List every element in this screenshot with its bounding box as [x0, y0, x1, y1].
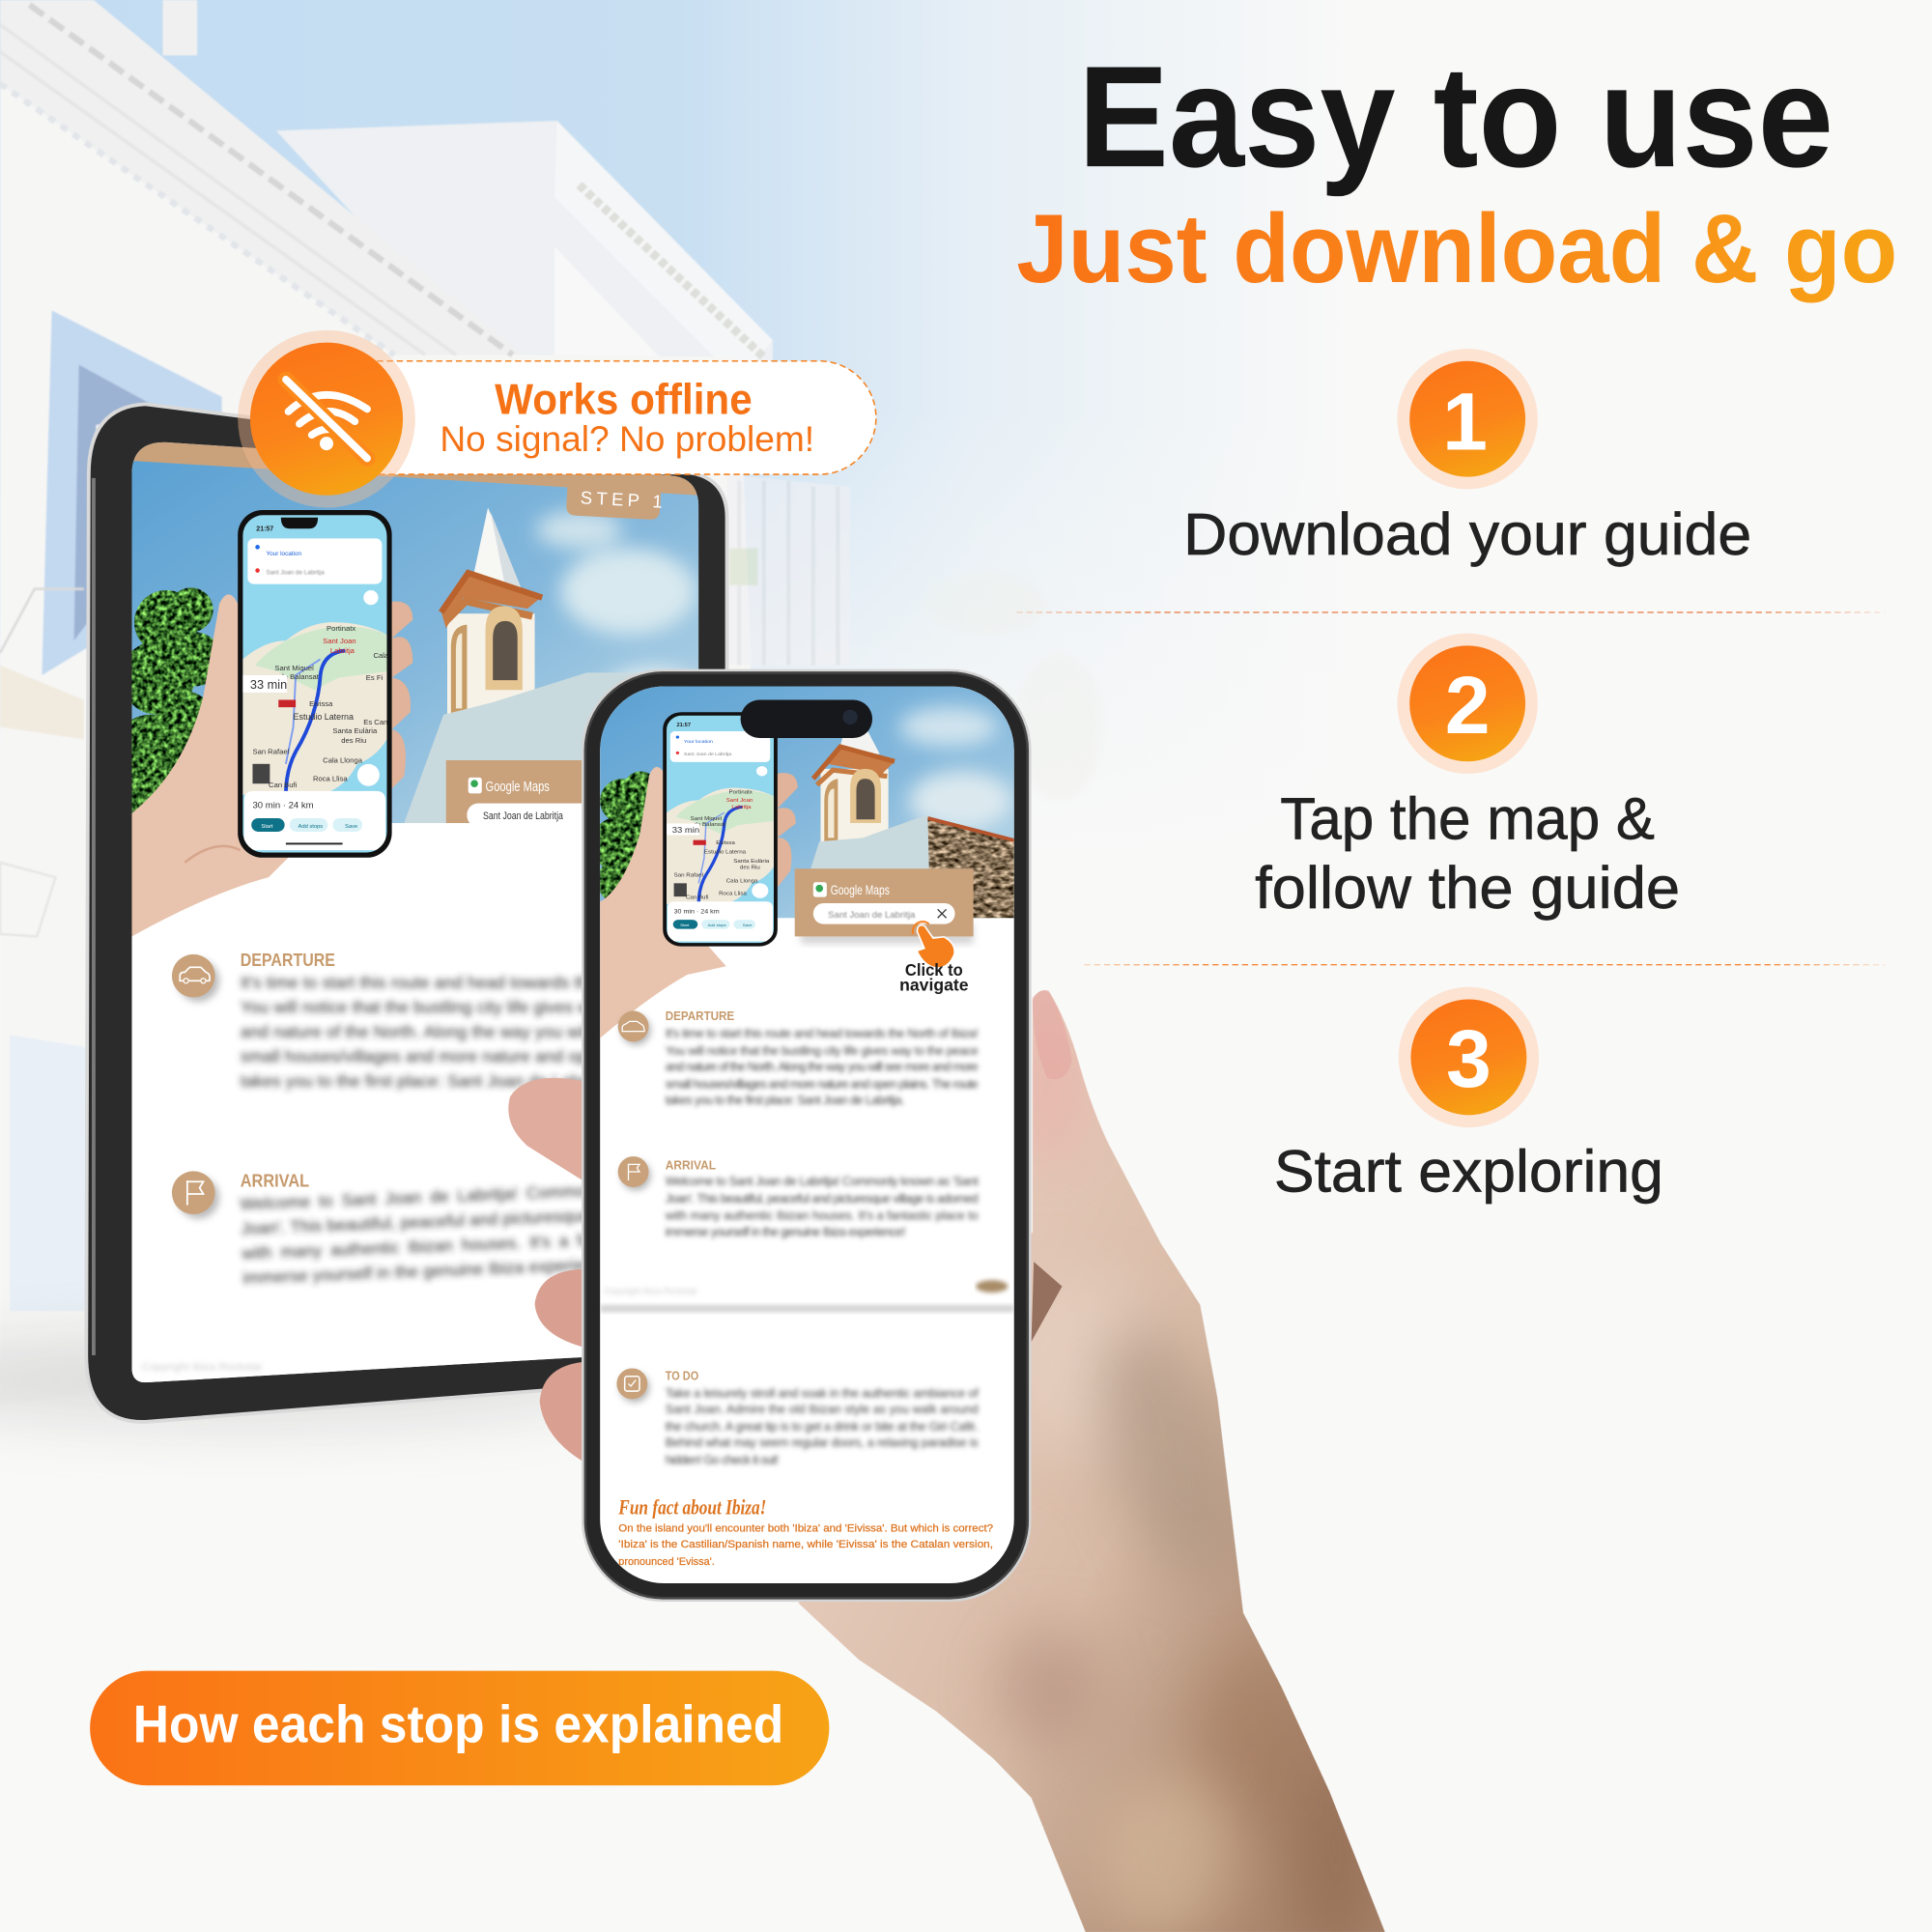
- phone photo: tree: [600, 771, 650, 898]
- phone: to do section: Behind what may seem regular doors, a relaxing paradise is: [666, 1435, 979, 1449]
- tablet: departure section: and nature of the North. Along the way you will see more and more: [241, 1022, 743, 1041]
- subtitle: Just download & go: [1016, 195, 1897, 303]
- phone: fun fact: Fun fact about Ibiza!: [618, 1496, 766, 1520]
- phone: tap hand icon: [913, 922, 953, 967]
- tablet: hand with mini phone: Can Bufi: [269, 781, 298, 789]
- tablet: departure section: [172, 953, 582, 1094]
- phone: hand with mini phone: Eivissa: [716, 840, 736, 846]
- tablet: hand with mini phone: Es Fi: [366, 673, 384, 682]
- tablet: hand with mini phone: 21:57: [256, 526, 273, 533]
- phone: hand with mini phone: Add stops: [708, 923, 726, 927]
- phone: hand with mini phone: [545, 712, 798, 1083]
- main phone screen: [600, 686, 1014, 1566]
- phone: hand with mini phone: Save: [743, 923, 753, 927]
- phone: hand with mini phone: Estudio Laterna: [704, 850, 747, 855]
- title: Easy to use: [1078, 36, 1833, 197]
- phone: departure section: takes you to the first place: Sant Joan de Labritja.: [666, 1093, 904, 1107]
- tablet shadow: [0, 1336, 616, 1424]
- phone: departure section: [618, 1009, 979, 1107]
- phone: departure section: It's time to start this route and head towards the North of Ibiza!: [666, 1026, 979, 1040]
- step 1: Download your guide: [1183, 501, 1751, 567]
- tablet photo: tree: [131, 587, 213, 813]
- phone photo: wall and stone: [807, 814, 1014, 918]
- tablet: hand with mini phone: Estudio Laterna: [294, 712, 354, 722]
- tablet header card: Sant Joan de Labritja: [483, 810, 563, 822]
- phone: arrival section: Joan'. This beautiful, peaceful and picturesque village is adorned: [666, 1191, 979, 1206]
- tablet: hand with mini phone: [131, 510, 412, 936]
- icon: wifi off: [286, 380, 367, 458]
- phone photo: church tower: [811, 731, 895, 841]
- step 3: 3: [1446, 1013, 1492, 1104]
- tablet: departure section: You will notice that the bustling city life gives way to the peace: [241, 997, 706, 1016]
- phone: to do section: hidden! Go check it out!: [666, 1452, 779, 1466]
- tablet: hand with mini phone: Portinatx: [327, 624, 355, 633]
- tablet: hand with mini phone: Cala Llonga: [323, 756, 363, 765]
- phone: hand with mini phone: Your location: [684, 739, 713, 745]
- tablet: hand with mini phone: Save: [345, 824, 357, 830]
- background: faint plants on right: [924, 572, 1104, 801]
- phone: arrival section: with many authentic Ibizan houses. It's a fantastic place to: [665, 1208, 979, 1223]
- phone: fun fact: pronounced 'Evissa'.: [618, 1556, 715, 1568]
- badge subtitle: No signal? No problem!: [440, 419, 814, 459]
- tablet: departure section: It's time to start this route and head towards the North of Ibiza!: [241, 973, 708, 992]
- tablet screen: [131, 442, 699, 1383]
- tablet header card: [446, 760, 582, 823]
- step 2: follow the guide: [1255, 855, 1680, 921]
- tablet: hand with mini phone: de Balansat: [280, 672, 320, 681]
- phone: hand with mini phone: 21:57: [676, 723, 691, 728]
- phone: google maps card: Sant Joan de Labritja: [828, 910, 916, 921]
- tablet: hand with mini phone: Sant Miquel: [274, 664, 314, 672]
- phone: hand with mini phone: des Riu: [740, 866, 760, 871]
- tablet: hand with mini phone: Santa Eulària: [332, 726, 378, 735]
- button: how each stop is explained: How each stop is explained: [133, 1694, 783, 1754]
- phone: hand with mini phone: Santa Eulària: [733, 859, 770, 865]
- tablet device: [86, 404, 743, 1422]
- phone: hand with mini phone: Roca Llisa: [719, 892, 748, 896]
- tablet: hand with mini phone: Add stops: [298, 824, 323, 830]
- phone: to do section: [616, 1368, 979, 1466]
- phone: arrival section: immerse yourself in the genuine Ibiza experience!: [666, 1224, 906, 1238]
- phone: page footer: [600, 1280, 1014, 1312]
- tablet: hand with mini phone: Eivissa: [309, 699, 333, 708]
- tablet header card: Google Maps: [486, 780, 550, 795]
- tablet: arrival section: with many authentic Ibizan houses. It's a fantastic place to: [241, 1226, 712, 1264]
- phone: hand with mini phone: San Rafael: [674, 873, 703, 878]
- badge title: Works offline: [495, 377, 753, 424]
- phone: hand with mini phone: 30 min · 24 km: [674, 909, 720, 915]
- tablet: hand with mini phone: Sant Joan: [323, 637, 356, 645]
- tablet: departure section: DEPARTURE: [241, 950, 335, 970]
- phone: departure section: and nature of the North. Along the way you will see more and more: [666, 1059, 979, 1073]
- tablet: hand with mini phone: Your location: [267, 551, 302, 557]
- button: how each stop is explained: [90, 1671, 829, 1785]
- step 2: Tap the map &: [1280, 786, 1655, 852]
- badge: works offline: [238, 330, 876, 508]
- tablet: arrival section: ARRIVAL: [241, 1170, 309, 1190]
- phone: fun fact: [618, 1496, 993, 1568]
- phone: hand with mini phone: Sant Joan de Labritja: [684, 752, 732, 757]
- tablet: departure section: takes you to the first place: Sant Joan de Labritja.: [241, 1071, 612, 1091]
- tablet photo: church tower: [441, 508, 542, 715]
- phone: page footer: Copyright Ibiza Rockstar: [604, 1286, 697, 1295]
- main hand: fingers behind phone: [508, 985, 1405, 1932]
- phone: departure section: small houses/villages and more nature and open plains. The route: [666, 1076, 979, 1091]
- tablet: arrival section: [172, 1171, 582, 1288]
- phone: hand with mini phone: Portinatx: [729, 790, 753, 795]
- phone: google maps card: [795, 868, 974, 944]
- phone: arrival section: ARRIVAL: [666, 1157, 716, 1172]
- phone: hand with mini phone: de Balansat: [694, 822, 725, 828]
- tablet: hand with mini phone: 33 min: [250, 677, 287, 692]
- phone: hand with mini phone: Labritja: [731, 805, 752, 810]
- step 1: [1183, 349, 1751, 567]
- main phone: [545, 669, 1032, 1602]
- phone: to do section: Sant Joan. Admire the old Ibizan style as you walk around: [666, 1402, 979, 1416]
- tablet: arrival section: Joan'. This beautiful, peaceful and picturesque village is adorned: [241, 1201, 727, 1238]
- tablet: arrival section: Welcome to Sant Joan de Labritja! Commonly known as 'Sant: [240, 1176, 738, 1214]
- phone: arrival section: Welcome to Sant Joan de Labritja! Commonly known as 'Sant: [666, 1174, 979, 1188]
- tablet: hand with mini phone: Labritja: [330, 646, 355, 655]
- phone: hand with mini phone: Can Bufi: [686, 895, 709, 901]
- step 2: [1255, 634, 1680, 921]
- tablet: departure section: small houses/villages and more nature and open plains. The route: [241, 1046, 737, 1065]
- tablet photo: clouds: [527, 500, 699, 672]
- tablet photo: white wall: [404, 672, 638, 823]
- tablet: hand with mini phone: Es Can: [363, 718, 387, 726]
- hand: shading: [998, 998, 1374, 1932]
- tablet: hand with mini phone: Sant Joan de Labritja: [267, 569, 325, 576]
- phone: dynamic island: [741, 699, 872, 738]
- phone: to do section: the church. A great tip is to get a drink or bite at the Giri Café.: [666, 1419, 979, 1434]
- step 1: 1: [1442, 377, 1488, 468]
- tablet: hand with mini phone: 30 min · 24 km: [252, 801, 314, 811]
- phone: hand with mini phone: Sant Joan: [726, 798, 753, 804]
- background: white building: [0, 0, 850, 1405]
- tablet: hand with mini phone: San Rafael: [252, 748, 290, 756]
- phone: hand with mini phone: Start: [680, 923, 690, 927]
- tablet: step tab: [566, 487, 662, 520]
- phone: click to navigate label: navigate: [899, 976, 969, 995]
- phone: fun fact: 'Ibiza' is the Castilian/Spanish name, while 'Eivissa' is the Catalan version,: [618, 1539, 993, 1550]
- phone: hand with mini phone: 33 min: [672, 825, 699, 835]
- phone: departure section: You will notice that the bustling city life gives way to the peace: [666, 1043, 979, 1058]
- phone: arrival section: [618, 1156, 979, 1238]
- phone: fun fact: On the island you'll encounter both 'Ibiza' and 'Eivissa'. But which is correct?: [618, 1522, 993, 1534]
- tablet: step tab: STEP 1: [580, 487, 668, 512]
- step 3: Start exploring: [1274, 1138, 1663, 1204]
- tablet: arrival section: immerse yourself in the genuine Ibiza experience!: [242, 1254, 617, 1288]
- tablet: hand with mini phone: Cala: [373, 651, 389, 660]
- step 3: [1274, 987, 1663, 1204]
- tablet: hand with mini phone: Roca Llisa: [313, 775, 348, 783]
- phone photo: clouds: [899, 707, 1012, 831]
- phone: to do section: TO DO: [666, 1369, 698, 1383]
- phone: click to navigate label: Click to: [905, 960, 963, 980]
- phone: departure section: DEPARTURE: [666, 1009, 734, 1023]
- phone: hand with mini phone: Sant Miquel: [691, 816, 722, 822]
- phone: to do section: Take a leisurely stroll and soak in the authentic ambiance of: [666, 1385, 979, 1400]
- step 2: 2: [1445, 660, 1491, 751]
- tablet: hand with mini phone: des Riu: [341, 736, 366, 745]
- phone: google maps card: Google Maps: [831, 883, 890, 897]
- phone: hand with mini phone: Cala Llonga: [726, 879, 758, 884]
- tablet: footer: Copyright Ibiza Rockstar: [142, 1361, 263, 1373]
- phone: click to navigate label: [899, 960, 969, 995]
- tablet: hand with mini phone: Start: [261, 824, 273, 830]
